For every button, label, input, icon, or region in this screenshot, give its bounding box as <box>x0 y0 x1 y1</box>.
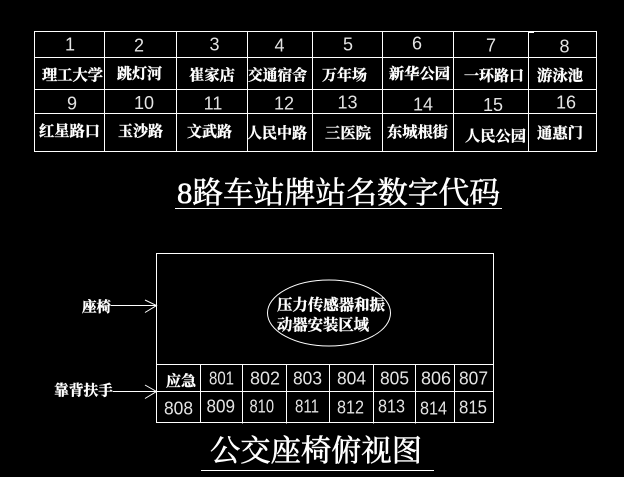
station names row one <box>42 64 583 84</box>
seat codes row two: 813 <box>378 396 405 416</box>
station numbers row one: 8 <box>559 36 570 56</box>
seat codes row one: 805 <box>380 368 409 388</box>
station numbers row one <box>65 34 570 56</box>
station numbers row two: 10 <box>134 93 154 113</box>
seat codes row two: 810 <box>250 396 274 416</box>
station numbers row two: 12 <box>274 94 294 114</box>
sensor area ellipse <box>268 280 390 346</box>
station numbers row two: 11 <box>204 94 222 114</box>
seat codes row one: 803 <box>293 368 322 388</box>
station names row two: 玉沙路 <box>118 122 163 140</box>
seat codes row one <box>209 368 488 388</box>
station names row one: 跳灯河 <box>117 64 162 82</box>
seat codes row two: 814 <box>420 398 447 418</box>
seat codes row one: 801 <box>209 368 234 388</box>
station names row two: 文武路 <box>187 122 232 140</box>
station numbers row two: 16 <box>556 92 576 112</box>
station numbers row one: 5 <box>343 34 353 54</box>
seat codes row one: 802 <box>250 368 280 388</box>
station names row two: 三医院 <box>325 124 371 142</box>
sensor area ellipse: 压力传感器和振 <box>277 295 386 314</box>
sensor area ellipse: 动器安装区域 <box>277 315 370 334</box>
seat codes row two: 808 <box>164 398 193 418</box>
callout: backrest armrest label with arrow: 靠背扶手 <box>54 382 114 400</box>
station names row two: 人民中路 <box>247 124 307 142</box>
station numbers row one: 4 <box>274 36 285 56</box>
station names row two: 东城根街 <box>387 123 448 141</box>
panel: station code table <box>34 32 596 152</box>
station names row two: 通惠门 <box>537 124 583 142</box>
station names row one: 理工大学 <box>42 66 103 84</box>
station names row one: 交通宿舍 <box>248 66 307 84</box>
station names row one: 一环路口 <box>464 66 524 84</box>
callout: seat label with arrow: 座椅 <box>82 298 111 316</box>
heading: seat top view title: 公交座椅俯视图 <box>210 435 422 468</box>
seat codes row one: 806 <box>421 368 451 388</box>
station names row two: 人民公园 <box>465 128 526 145</box>
seat codes row two: 811 <box>295 396 319 416</box>
station numbers row one: 2 <box>134 36 144 56</box>
seat codes row two: 815 <box>459 398 487 418</box>
station names row one: 游泳池 <box>537 66 583 84</box>
callout: seat label with arrow <box>82 298 156 316</box>
seat codes row two: 812 <box>337 398 364 418</box>
station numbers row one: 6 <box>412 34 422 54</box>
heading: station code title: 8路车站牌站名数字代码 <box>177 177 500 210</box>
station numbers row two: 14 <box>413 94 433 114</box>
station numbers row one: 1 <box>65 34 75 54</box>
seat outline and armrest grid <box>156 254 494 424</box>
table grid <box>34 32 596 152</box>
station numbers row two: 9 <box>67 94 77 114</box>
panel: bus seat top view <box>156 254 494 424</box>
callout: backrest armrest label with arrow <box>54 382 156 400</box>
seat codes row one: 804 <box>337 368 366 388</box>
seat codes row two: 809 <box>206 396 235 416</box>
station numbers row one: 3 <box>209 34 220 54</box>
station numbers row two: 15 <box>483 95 503 115</box>
seat codes row two <box>164 396 487 418</box>
station names row one: 崔家店 <box>189 66 235 84</box>
seat codes row one: 807 <box>459 368 488 388</box>
emergency cell label: 应急 <box>166 372 197 390</box>
station names row one: 新华公园 <box>389 64 450 82</box>
station names row two: 红星路口 <box>39 122 100 140</box>
station numbers row two: 13 <box>337 92 358 112</box>
station numbers row two <box>67 92 576 115</box>
station numbers row one: 7 <box>486 36 496 56</box>
station names row two <box>39 122 583 145</box>
station names row one: 万年场 <box>322 66 367 84</box>
